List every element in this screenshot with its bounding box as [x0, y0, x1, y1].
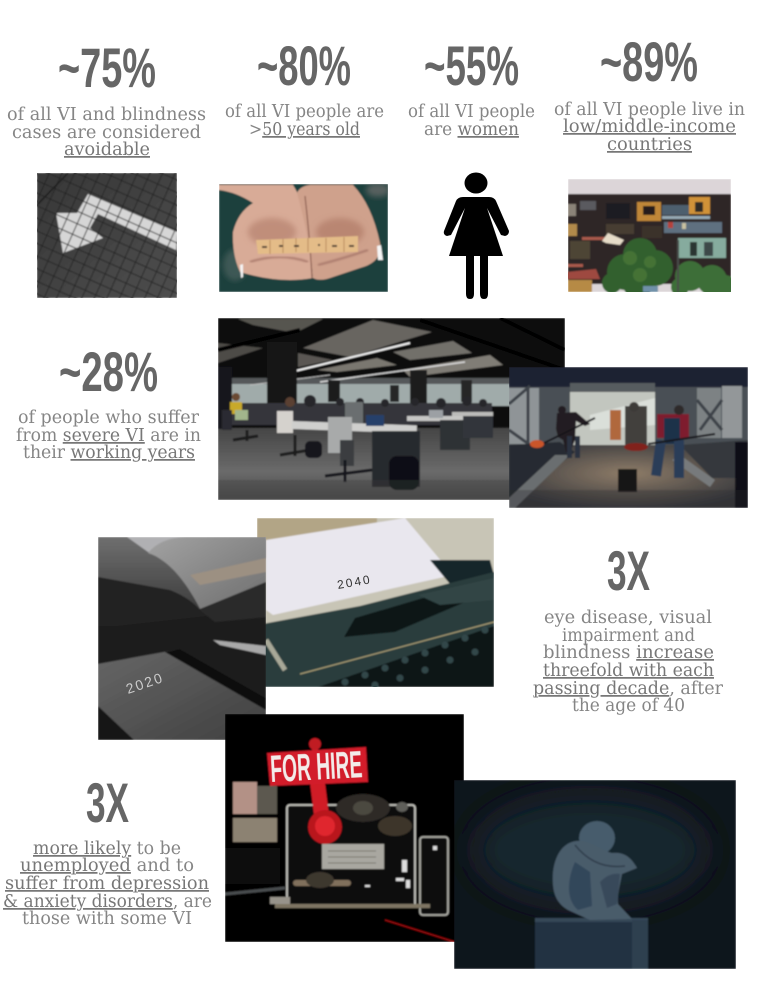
text: working years: their working years [23, 443, 195, 463]
text: more likely: unemployed and to [20, 856, 194, 876]
photo: hands holding senior tiles [219, 184, 388, 292]
text: working years [16, 408, 201, 463]
stat: 3X with each decade [533, 539, 724, 716]
photo text: 2020: 2020 [124, 669, 166, 697]
worker: left [556, 406, 590, 458]
text: threefold increase: passing decade, after [533, 679, 724, 699]
text: threefold increase: threefold with each [543, 661, 714, 681]
text: working years: from severe VI are in [16, 426, 201, 446]
text: working years: of people who suffer [18, 408, 200, 428]
photo: workers shovelling in smoke [509, 367, 748, 508]
text: women: are women [424, 120, 519, 140]
stat: 80 percent over 50 [225, 34, 384, 140]
text: threefold increase [533, 608, 724, 716]
photo: open plan office [218, 318, 565, 500]
text: women [408, 102, 535, 140]
workers: background [610, 402, 647, 446]
stat: 75 percent avoidable [7, 36, 206, 160]
heading: 3X: 3X [607, 539, 650, 602]
text: income: low/middle-income [563, 117, 736, 137]
photo: for hire taxi meter [225, 714, 464, 942]
text: more likely: & anxiety disorders, are [3, 892, 212, 912]
text: avoidable cases: avoidable [64, 140, 150, 160]
heading: ~80%: ~80% [257, 34, 351, 97]
text: threefold increase: impairment and [562, 626, 695, 646]
photo: arrow on paving [37, 173, 177, 298]
text: age [225, 102, 384, 140]
stat: 89 percent low/middle income [554, 30, 745, 155]
photo: typewriter with 2040 [257, 518, 494, 687]
photo text: FOR HIRE: FOR HIRE [269, 744, 363, 791]
photo: notebook with 2020 [98, 537, 266, 740]
text: avoidable cases: of all VI and blindness [7, 105, 206, 125]
text: more likely: those with some VI [22, 909, 192, 929]
text: avoidable cases [7, 105, 206, 160]
text: more likely: suffer from depression [5, 874, 209, 894]
text: avoidable cases: cases are considered [12, 123, 201, 143]
heading: ~75%: ~75% [58, 36, 156, 99]
text: income: countries [607, 135, 692, 155]
text: age: of all VI people are [225, 102, 384, 122]
photo: apartment buildings [568, 179, 731, 292]
text: income: of all VI people live in [554, 100, 745, 120]
stat: 3X unemployment and depression [3, 771, 212, 929]
heading: ~89%: ~89% [600, 30, 698, 93]
icon: woman silhouette [444, 172, 509, 299]
photo: statue hugging knees [454, 780, 736, 969]
text: more likely: more likely to be [33, 839, 181, 859]
stat: 55 percent women [408, 34, 535, 140]
photo text: 2040: 2040 [336, 572, 373, 592]
text: more likely [3, 839, 212, 929]
text: threefold increase: the age of 40 [572, 696, 685, 716]
worker: right in red [624, 405, 715, 478]
text: age: >50 years old [249, 120, 360, 140]
stat: 28 percent working years [16, 340, 201, 463]
heading: ~55%: ~55% [424, 34, 519, 97]
heading: 3X: 3X [86, 771, 129, 834]
text: threefold increase: eye disease, visual [544, 608, 712, 628]
text: income [554, 100, 745, 155]
text: threefold increase: blindness increase [543, 643, 714, 663]
text: women: of all VI people [408, 102, 535, 122]
heading: ~28%: ~28% [59, 340, 158, 403]
